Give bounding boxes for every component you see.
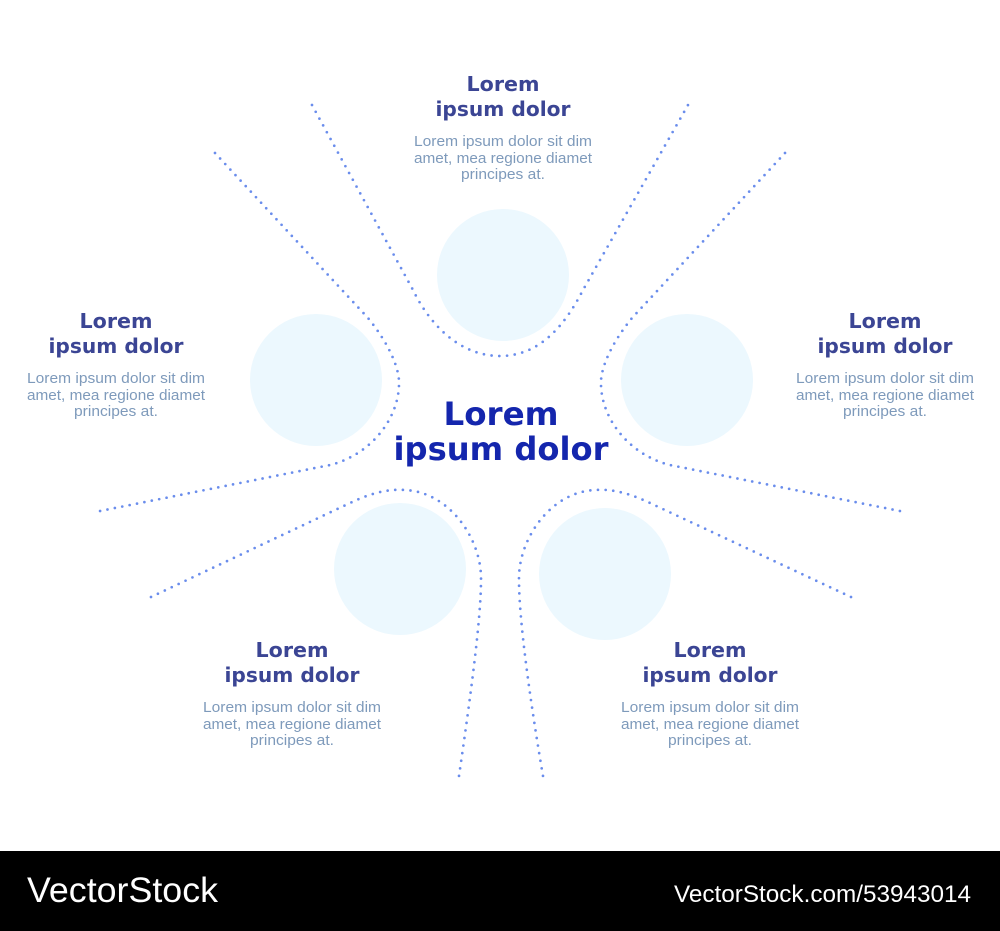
heading: left: ipsum dolor: [48, 334, 184, 358]
description: left: [27, 370, 206, 420]
heading: right: ipsum dolor: [818, 334, 953, 358]
description: right: [796, 370, 975, 420]
dotted divider: left: [100, 153, 399, 511]
center title: [394, 395, 609, 468]
icon circle: left: [250, 314, 382, 446]
description: right: principes at.: [843, 403, 927, 420]
dotted divider: lower left: [151, 490, 481, 776]
text block: top: [414, 72, 593, 183]
footer logo text: VectorStock: [27, 871, 219, 910]
description: lower right: [621, 699, 800, 749]
heading: right: Lorem: [848, 309, 922, 333]
description: top: Lorem ipsum dolor sit dim: [414, 133, 592, 150]
description: right: amet, mea regione diamet: [796, 387, 975, 404]
heading: lower left: ipsum dolor: [224, 663, 360, 687]
heading: lower right: Lorem: [674, 638, 746, 662]
heading: top: [436, 72, 571, 121]
heading: lower left: [224, 638, 360, 687]
heading: lower right: [642, 638, 778, 687]
text block: right: [796, 309, 975, 420]
heading: top: ipsum dolor: [436, 97, 571, 121]
center title: ipsum dolor: [394, 430, 609, 468]
description: lower left: principes at.: [250, 732, 334, 749]
description: left: Lorem ipsum dolor sit dim: [27, 370, 205, 387]
icon circle: lower right: [539, 508, 671, 640]
icon circle: top: [437, 209, 569, 341]
heading: left: [48, 309, 184, 358]
description: lower right: principes at.: [668, 732, 752, 749]
dotted divider: right: [601, 153, 900, 511]
heading: left: Lorem: [80, 309, 152, 333]
heading: lower left: Lorem: [256, 638, 328, 662]
heading: right: [818, 309, 953, 358]
heading: top: Lorem: [466, 72, 540, 96]
description: lower right: Lorem ipsum dolor sit dim: [621, 699, 799, 716]
icon circle: right: [621, 314, 753, 446]
description: right: Lorem ipsum dolor sit dim: [796, 370, 974, 387]
icon circle: lower left: [334, 503, 466, 635]
description: top: [414, 133, 593, 183]
dotted divider: lower right: [519, 490, 851, 776]
description: lower right: amet, mea regione diamet: [621, 716, 800, 733]
dotted divider: top: [312, 105, 688, 356]
description: lower left: [203, 699, 382, 749]
description: left: amet, mea regione diamet: [27, 387, 206, 404]
description: lower left: amet, mea regione diamet: [203, 716, 382, 733]
footer bar: [0, 851, 1000, 931]
description: left: principes at.: [74, 403, 158, 420]
center title: Lorem: [444, 395, 558, 433]
text block: lower left: [203, 638, 382, 749]
text block: left: [27, 309, 206, 420]
text block: lower right: [621, 638, 800, 749]
description: top: amet, mea regione diamet: [414, 150, 593, 167]
heading: lower right: ipsum dolor: [642, 663, 778, 687]
footer image id: VectorStock.com/53943014: [674, 881, 971, 908]
description: lower left: Lorem ipsum dolor sit dim: [203, 699, 381, 716]
description: top: principes at.: [461, 166, 545, 183]
